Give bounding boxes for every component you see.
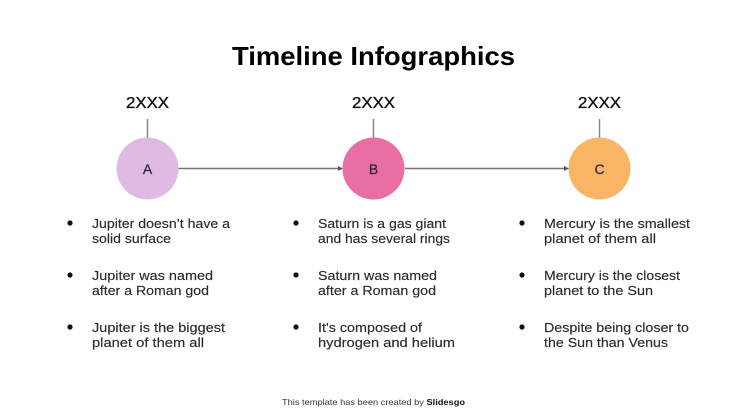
connector A xyxy=(146,119,148,138)
arrow: A to B xyxy=(178,166,343,171)
bullet list C: Despite being closer to xyxy=(544,320,689,335)
bullet list A: Jupiter doesn’t have a xyxy=(92,216,231,231)
year B: 2XXX xyxy=(352,95,395,112)
arrow: B to C xyxy=(405,166,569,171)
column B milestone xyxy=(342,95,404,200)
bullet list B xyxy=(293,216,455,350)
bullet list A: solid surface xyxy=(92,231,171,246)
title: Timeline Infographics xyxy=(232,41,515,71)
bullet list C: Mercury is the closest xyxy=(544,268,680,283)
column A milestone xyxy=(116,95,178,200)
bullet list B: Saturn was named xyxy=(318,268,437,283)
circle C xyxy=(568,138,630,200)
bullet list B: hydrogen and helium xyxy=(318,335,455,350)
bullet list C: the Sun than Venus xyxy=(544,335,668,350)
circle B xyxy=(342,138,404,200)
bullet list B: Saturn is a gas giant xyxy=(318,216,446,231)
column C milestone xyxy=(568,95,630,200)
bullet list A xyxy=(67,216,231,350)
letter A: A xyxy=(143,161,153,177)
bullet list B: and has several rings xyxy=(318,231,450,246)
connector C xyxy=(598,119,600,138)
connector B xyxy=(372,119,374,138)
bullet list A: planet of them all xyxy=(92,335,204,350)
bullet list A: after a Roman god xyxy=(92,283,209,298)
bullet list C: planet of them all xyxy=(544,231,656,246)
bullet list B: after a Roman god xyxy=(318,283,436,298)
year C: 2XXX xyxy=(578,95,621,112)
bullet list C: Mercury is the smallest xyxy=(544,216,690,231)
bullet list A: Jupiter was named xyxy=(92,268,213,283)
bullet list B: It's composed of xyxy=(318,320,422,335)
bullet list C: planet to the Sun xyxy=(544,283,653,298)
bullet list C xyxy=(519,216,690,350)
footer credit: This template has been created by Slidesgo xyxy=(282,398,465,407)
bullet list A: Jupiter is the biggest xyxy=(92,320,225,335)
year A: 2XXX xyxy=(126,95,169,112)
letter B: B xyxy=(369,161,378,177)
letter C: C xyxy=(594,161,605,177)
circle A xyxy=(116,138,178,200)
